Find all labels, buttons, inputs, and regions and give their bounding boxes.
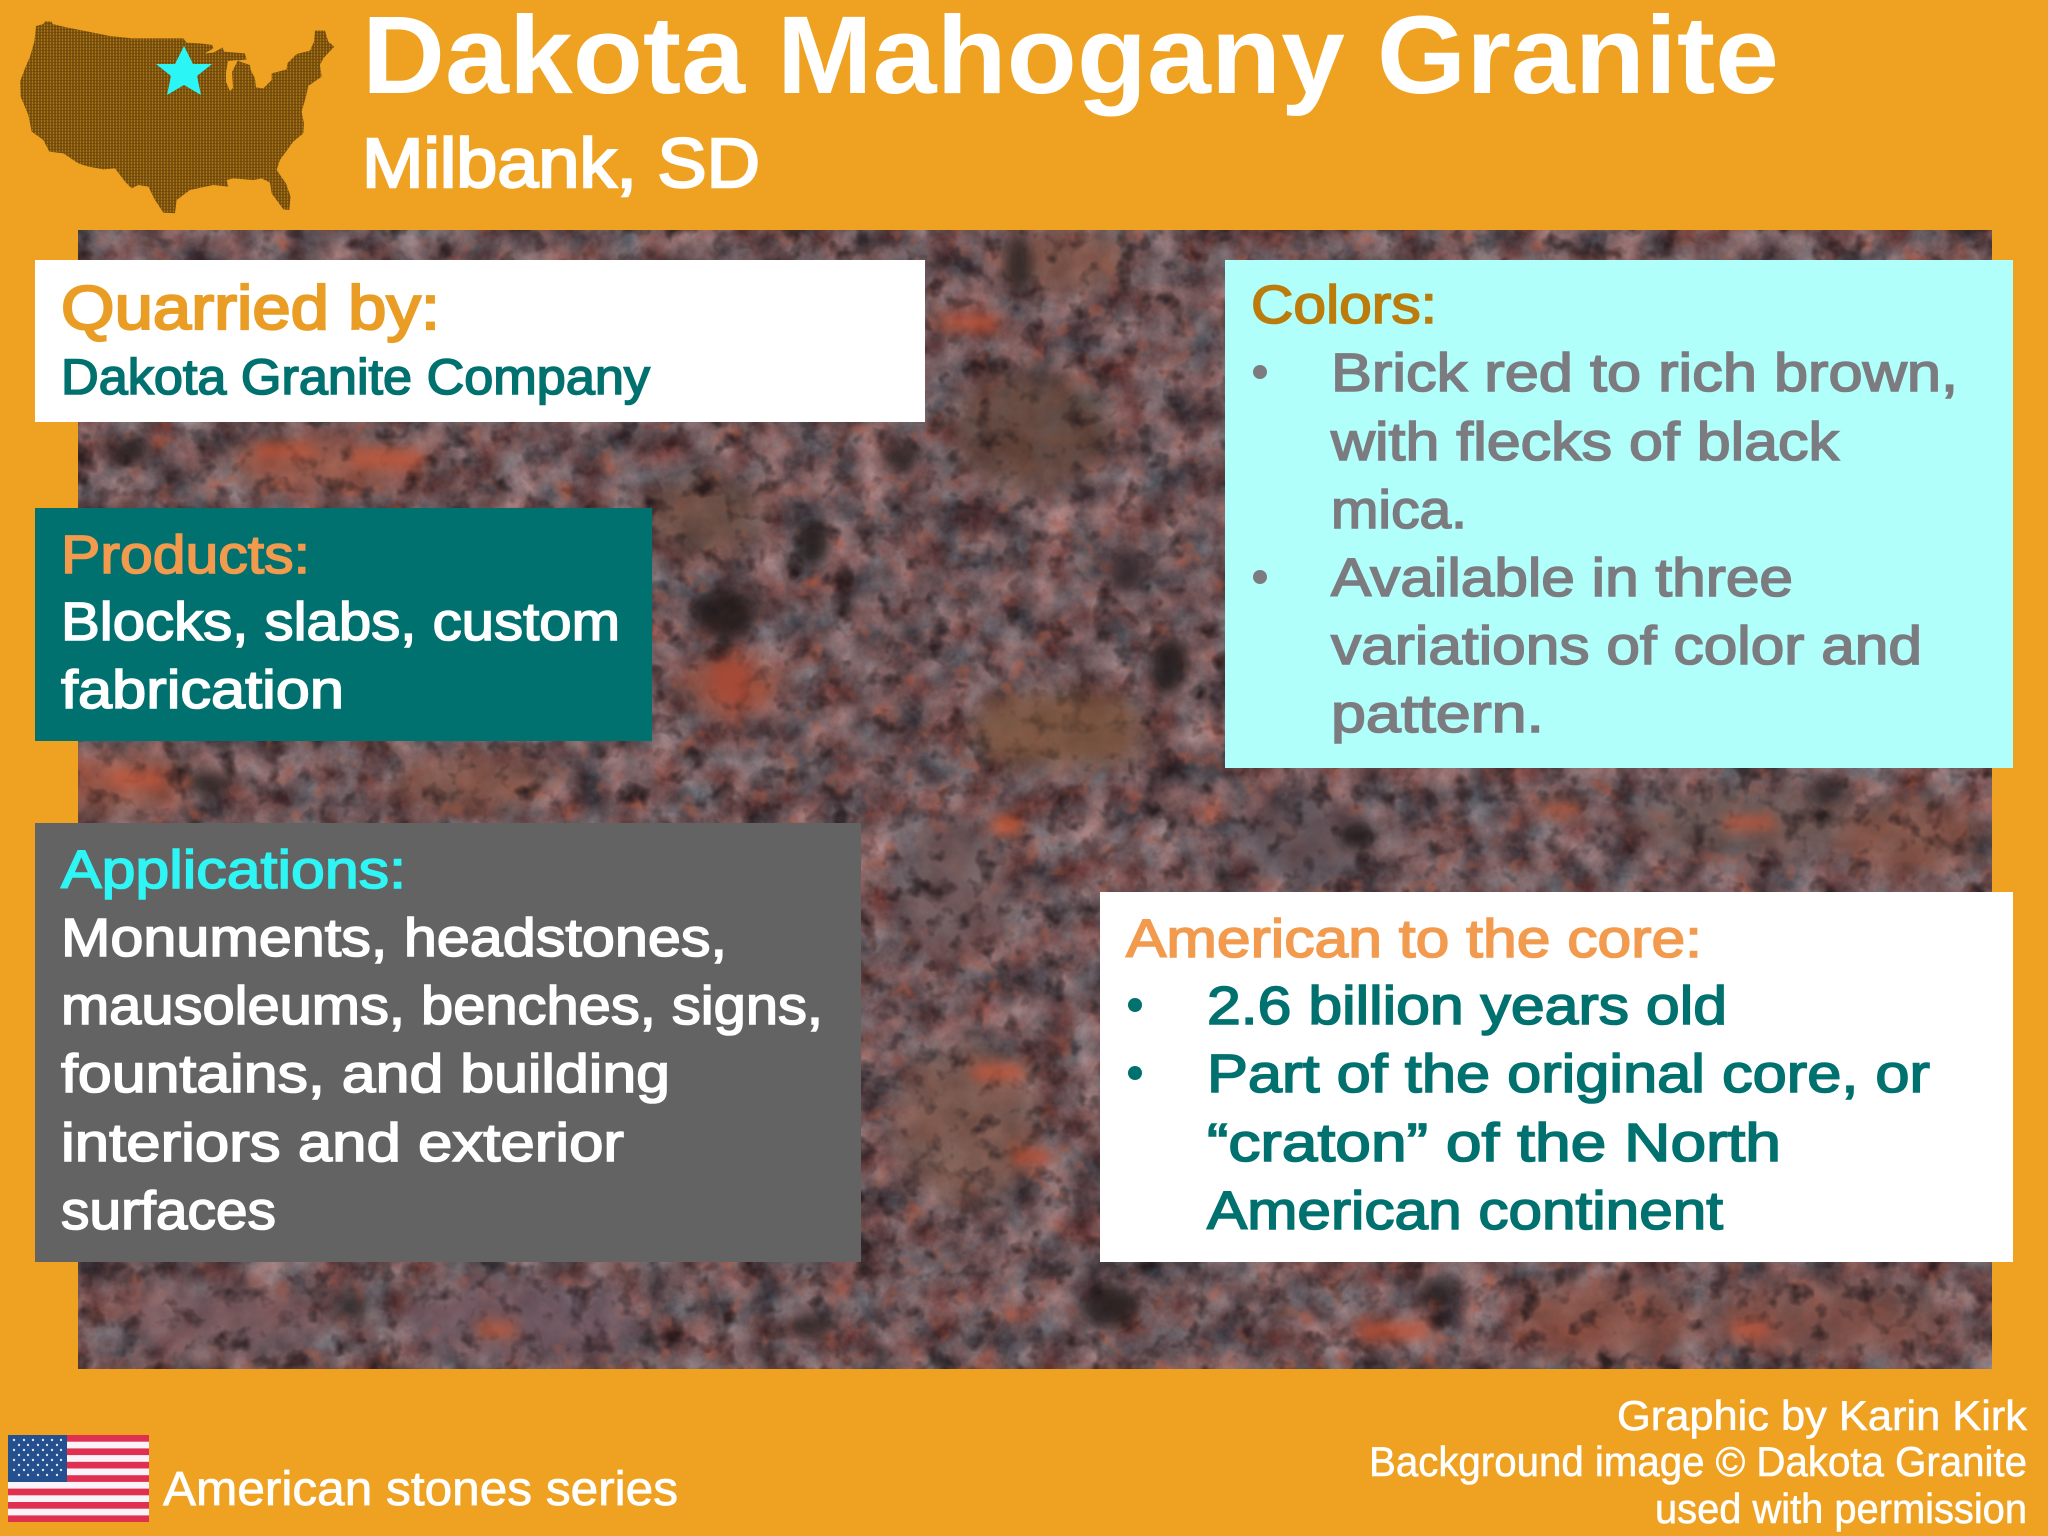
credits: [1369, 1392, 2028, 1532]
credits: used with permission: [1655, 1485, 2027, 1532]
applications text: fountains, and building: [61, 1044, 670, 1104]
applications text: surfaces: [61, 1181, 276, 1241]
credits: Background image © Dakota Granite: [1369, 1438, 2027, 1485]
applications text: interiors and exterior: [61, 1113, 624, 1173]
colors bullets: Available in three: [1331, 548, 1793, 608]
heading: american to the core: American to the core:: [1126, 909, 1702, 969]
colors bullets: pattern.: [1331, 684, 1544, 744]
colors bullets: variations of color and: [1331, 616, 1922, 676]
heading: products: Products:: [61, 525, 310, 585]
series label: American stones series: [163, 1463, 678, 1516]
granite background image: [39, 230, 1992, 1369]
core bullets: “craton” of the North: [1207, 1113, 1781, 1173]
credits: Graphic by Karin Kirk: [1617, 1392, 2028, 1439]
colors bullets: with flecks of black: [1330, 412, 1840, 472]
colors bullets: Brick red to rich brown,: [1331, 343, 1958, 403]
icon: american flag: [8, 1435, 149, 1522]
applications text: [61, 908, 823, 1241]
applications text: mausoleums, benches, signs,: [61, 976, 823, 1036]
star: Milbank location: [156, 46, 212, 95]
applications text: Monuments, headstones,: [61, 908, 727, 968]
texture speckle: [78, 230, 1992, 1369]
heading: colors: Colors:: [1251, 275, 1437, 335]
heading: quarried by: Quarried by:: [61, 274, 440, 343]
products text: fabrication: [61, 660, 344, 720]
heading: applications: Applications:: [61, 840, 406, 900]
colors bullets: mica.: [1331, 480, 1467, 540]
map silhouette: [20, 21, 334, 213]
panel: colors: [1225, 260, 2013, 768]
panel: products: [35, 508, 652, 741]
panel: american to the core: [1100, 892, 2013, 1262]
US map with star: [20, 21, 334, 213]
panel: applications: [35, 823, 861, 1262]
panel: quarried by: [35, 260, 925, 422]
company name: Dakota Granite Company: [61, 349, 650, 405]
core bullets: [1128, 976, 1930, 1241]
subtitle: Milbank, SD: [362, 124, 760, 202]
core bullets: 2.6 billion years old: [1207, 976, 1727, 1036]
colors bullets: [1253, 343, 1958, 744]
lake michigan: [226, 60, 238, 91]
products text: [61, 592, 620, 720]
core bullets: American continent: [1207, 1181, 1723, 1241]
core bullets: Part of the original core, or: [1207, 1044, 1930, 1104]
products text: Blocks, slabs, custom: [61, 592, 620, 652]
